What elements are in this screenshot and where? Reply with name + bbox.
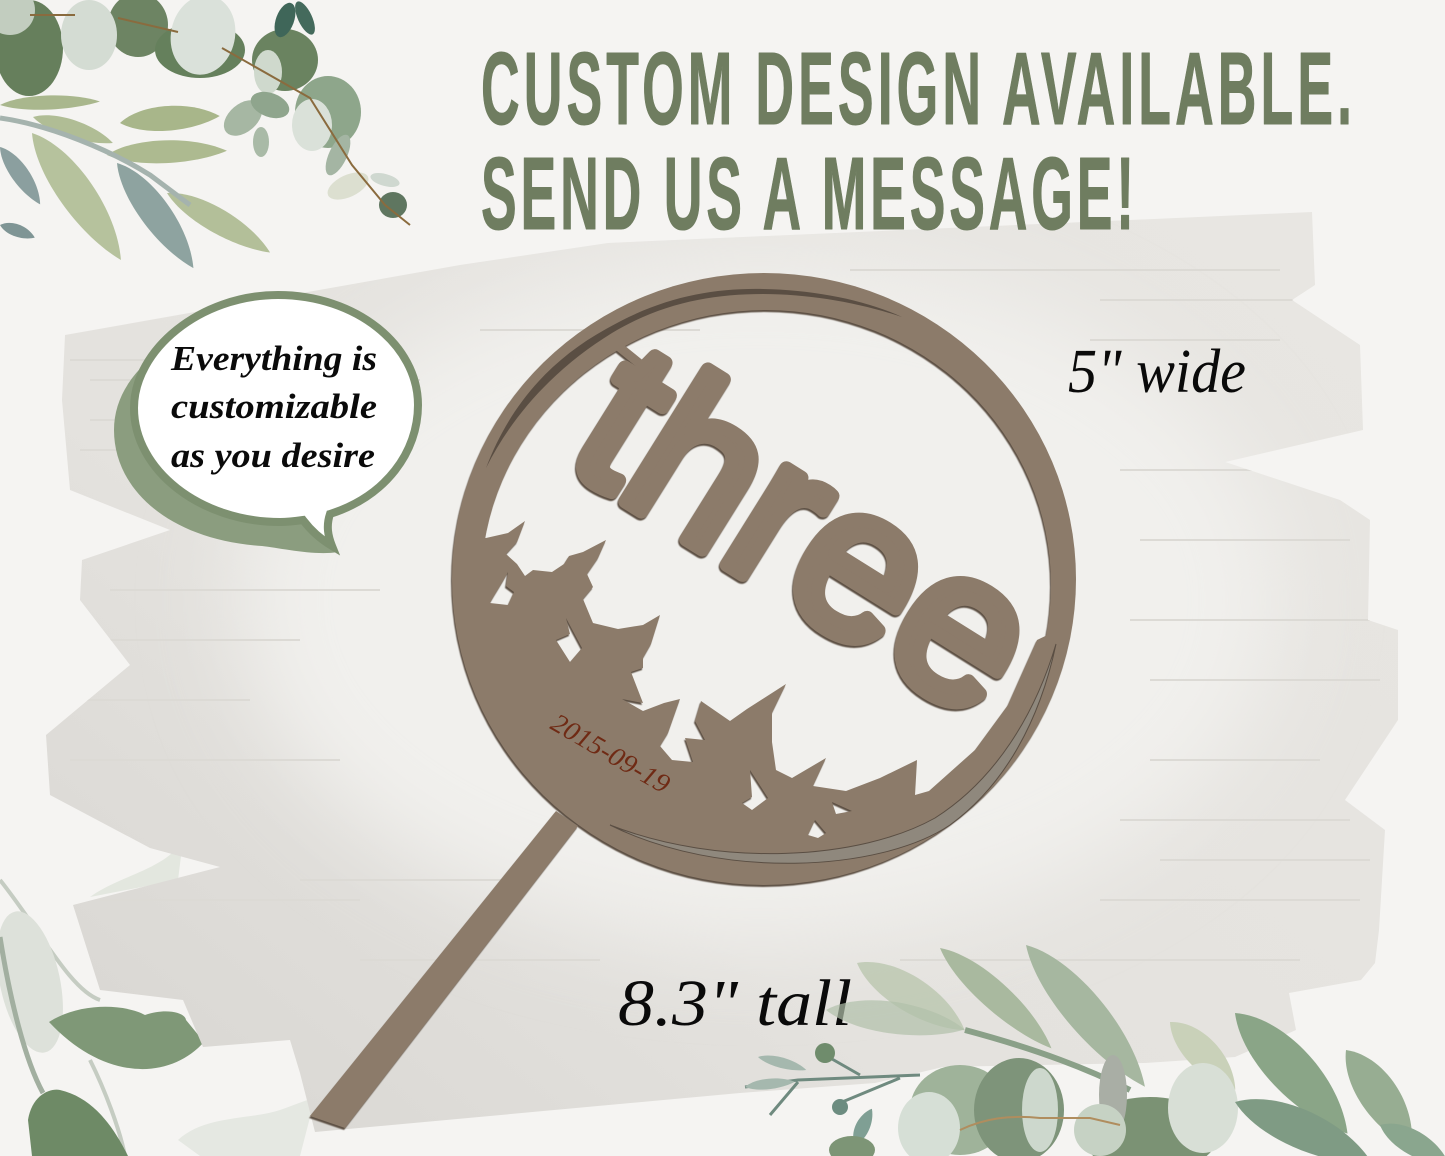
foliage: top left <box>0 0 410 276</box>
dimension: width: 5" wide <box>1068 338 1246 406</box>
speech bubble <box>114 295 418 553</box>
foliage: bottom left <box>0 840 315 1156</box>
bubble shadow <box>114 322 338 553</box>
bubble text: Everything is <box>170 339 377 378</box>
bubble text: as you desire <box>171 436 375 475</box>
topper stem <box>310 811 578 1128</box>
round eucalyptus leaves <box>0 0 410 225</box>
bubble text: customizable <box>171 387 377 426</box>
brush stroke backdrop <box>46 212 1398 1132</box>
engraved date: 2015-09-19 <box>546 707 676 799</box>
foliage: bottom right <box>744 931 1445 1156</box>
bubble body <box>134 295 418 546</box>
cake topper <box>310 273 1081 1128</box>
sprig <box>744 1043 920 1148</box>
long leaves <box>0 94 277 276</box>
title <box>481 32 1352 252</box>
bubble text <box>170 339 377 475</box>
title line 1: CUSTOM DESIGN AVAILABLE. <box>481 32 1352 147</box>
long leaves <box>824 931 1429 1156</box>
topper disc <box>452 273 1076 885</box>
round eucalyptus leaves <box>829 1055 1445 1156</box>
title line 2: SEND US A MESSAGE! <box>481 137 1134 252</box>
word three: three <box>538 297 1081 761</box>
connector bar <box>618 346 650 372</box>
top ring slit <box>486 289 902 468</box>
dimension: height: 8.3" tall <box>618 967 852 1040</box>
lower ring crescent <box>610 644 1056 863</box>
